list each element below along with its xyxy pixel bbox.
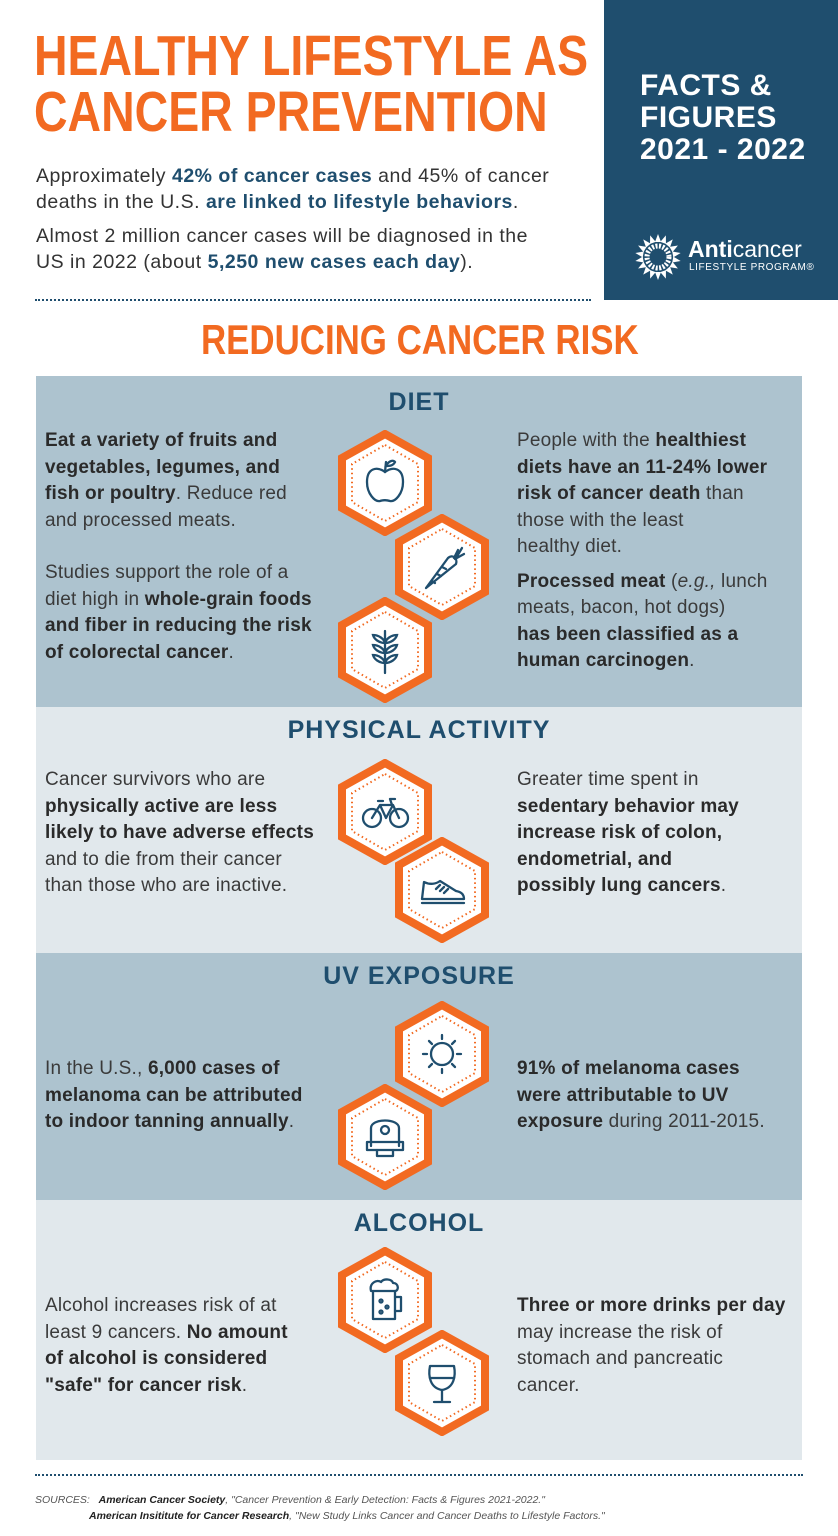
physical activity left text: physically active are less — [45, 796, 277, 816]
physical activity right text: possibly lung cancers. — [517, 875, 726, 896]
alcohol left text: "safe" for cancer risk. — [45, 1374, 247, 1396]
diet left text: fish or poultry. Reduce red — [45, 483, 287, 504]
alcohol left text: of alcohol is considered — [45, 1348, 267, 1369]
uv heading: UV EXPOSURE — [323, 962, 515, 990]
uv left text — [45, 1058, 303, 1132]
alcohol left text: Alcohol increases risk of at — [45, 1295, 277, 1316]
diet left text: vegetables, legumes, and — [45, 456, 280, 478]
diet right text: meats, bacon, hot dogs) — [517, 597, 725, 618]
intro text: Almost 2 million cancer cases will be diagnosed in the — [36, 225, 528, 247]
intro text — [36, 165, 549, 273]
physical activity right text: endometrial, and — [517, 848, 672, 870]
alcohol left text: least 9 cancers. No amount — [45, 1322, 288, 1342]
intro text: Approximately 42% of cancer cases and 45% of cancer — [36, 165, 549, 187]
title — [34, 24, 588, 144]
diet right text: Processed meat (e.g., lunch — [517, 570, 767, 592]
panel: physical activity — [36, 707, 802, 953]
alcohol right text — [517, 1295, 786, 1396]
panel: facts & figures header box — [604, 0, 838, 300]
physical activity right text: Greater time spent in — [517, 769, 699, 790]
icon: sun — [395, 1001, 489, 1107]
physical activity left text: and to die from their cancer — [45, 848, 282, 870]
uv right text — [517, 1058, 765, 1132]
alcohol right text: stomach and pancreatic — [517, 1348, 723, 1369]
diet right text: healthy diet. — [517, 536, 622, 557]
panel: uv exposure — [36, 953, 802, 1200]
panel: alcohol — [36, 1200, 802, 1460]
diet right text: People with the healthiest — [517, 430, 746, 451]
diet right text: risk of cancer death than — [517, 483, 744, 504]
logo: LIFESTYLE PROGRAM® — [689, 262, 814, 273]
title: HEALTHY LIFESTYLE AS — [34, 24, 588, 88]
icon: wine glass — [395, 1330, 489, 1436]
uv right text: exposure during 2011-2015. — [517, 1111, 765, 1132]
intro text: deaths in the U.S. are linked to lifestyle behaviors. — [36, 191, 519, 213]
physical activity right text — [517, 769, 739, 896]
facts heading: FACTS & — [640, 69, 772, 102]
diet left text: Studies support the role of a — [45, 562, 288, 583]
icon: beer mug — [338, 1247, 432, 1353]
diet left text: diet high in whole-grain foods — [45, 588, 312, 610]
physical activity left text: Cancer survivors who are — [45, 769, 265, 790]
alcohol right text: cancer. — [517, 1374, 580, 1396]
physical activity left text: than those who are inactive. — [45, 875, 287, 896]
icon: sneaker — [395, 837, 489, 943]
sources — [35, 1494, 606, 1522]
diet right text: human carcinogen. — [517, 650, 695, 671]
diet left text: of colorectal cancer. — [45, 642, 234, 662]
physical activity right text: sedentary behavior may — [517, 796, 739, 816]
alcohol heading: ALCOHOL — [354, 1209, 484, 1237]
uv left text: to indoor tanning annually. — [45, 1111, 294, 1132]
icon: apple — [338, 430, 432, 536]
facts heading: 2021 - 2022 — [640, 133, 806, 166]
title: CANCER PREVENTION — [34, 80, 548, 144]
physical activity right text: increase risk of colon, — [517, 822, 722, 843]
icon: tanning bed — [338, 1084, 432, 1190]
physical activity heading: PHYSICAL ACTIVITY — [288, 716, 550, 744]
diet left text — [45, 430, 312, 662]
physical activity left text: likely to have adverse effects — [45, 822, 314, 843]
section heading: reducing cancer risk: REDUCING CANCER RISK — [201, 316, 639, 363]
sources: American Insititute for Cancer Research, "New Study Links Cancer and Cancer Deaths to Lifestyle Factors." — [89, 1510, 605, 1522]
uv left text: In the U.S., 6,000 cases of — [45, 1058, 280, 1079]
diet right text: has been classified as a — [517, 624, 738, 644]
physical activity left text — [45, 769, 314, 896]
diet heading: DIET — [389, 388, 449, 416]
logo: Anticancer — [688, 236, 802, 262]
alcohol right text: Three or more drinks per day — [517, 1295, 786, 1316]
sources: SOURCES: American Cancer Society, "Cancer Prevention & Early Detection: Facts & Figures 2021-2022." — [35, 1494, 545, 1506]
icon: wheat — [338, 597, 432, 703]
diet right text: those with the least — [517, 510, 684, 530]
icon: bicycle — [338, 759, 432, 865]
logo — [636, 234, 814, 280]
diet left text: Eat a variety of fruits and — [45, 430, 277, 451]
facts heading — [640, 69, 806, 166]
diet right text: diets have an 11-24% lower — [517, 456, 767, 478]
uv right text: 91% of melanoma cases — [517, 1058, 740, 1079]
intro text: US in 2022 (about 5,250 new cases each day). — [36, 251, 473, 273]
icon: carrot — [395, 514, 489, 620]
alcohol right text: may increase the risk of — [517, 1322, 722, 1342]
diet right text — [517, 430, 767, 671]
uv left text: melanoma can be attributed — [45, 1084, 303, 1106]
uv right text: were attributable to UV — [517, 1084, 729, 1106]
facts heading: FIGURES — [640, 101, 777, 134]
diet left text: and processed meats. — [45, 510, 236, 530]
diet left text: and fiber in reducing the risk — [45, 615, 312, 636]
alcohol left text — [45, 1295, 288, 1396]
panel: diet — [36, 376, 802, 707]
